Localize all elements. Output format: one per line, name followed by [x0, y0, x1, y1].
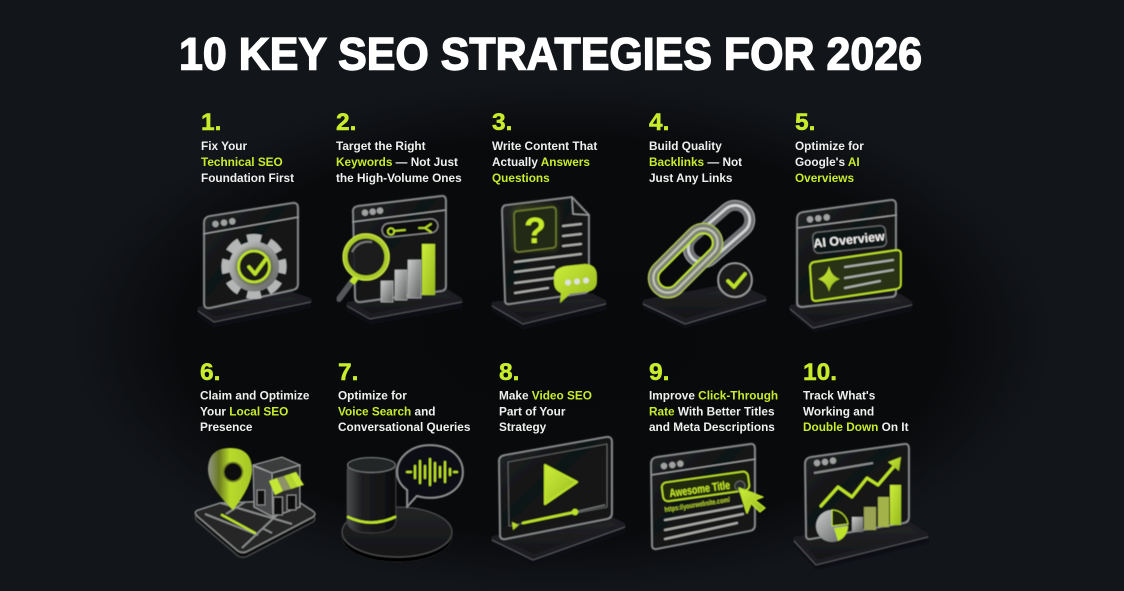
heading 1	[201, 139, 294, 185]
panel: strategy 7	[338, 359, 471, 562]
heading 2: the High-Volume Ones	[336, 171, 462, 185]
heading 8	[499, 388, 592, 434]
heading 3: Actually Answers	[492, 155, 590, 169]
heading 2: Target the Right	[336, 139, 426, 153]
icon: document with question mark	[492, 197, 606, 327]
heading 7: Conversational Queries	[338, 420, 471, 434]
number 8: 8.	[499, 359, 519, 386]
panel: strategy 3	[492, 109, 606, 327]
icon: search result window with cursor: Awesome Title	[669, 480, 731, 500]
heading 1: Fix Your	[201, 139, 248, 153]
heading 1: Technical SEO	[201, 155, 283, 169]
number 2: 2.	[336, 109, 356, 136]
heading 2	[336, 139, 462, 185]
number 6: 6.	[200, 359, 220, 386]
icon: document with question mark: ?	[524, 210, 546, 251]
heading 1: Foundation First	[201, 171, 294, 185]
icon: AI Overview window: AI Overview	[813, 229, 886, 251]
panel: strategy 4	[640, 109, 766, 326]
heading 10	[803, 388, 909, 434]
number 10: 10.	[803, 359, 837, 386]
icon: AI Overview window	[790, 200, 912, 330]
heading 9	[649, 388, 778, 434]
icon: video player	[492, 437, 625, 562]
icon: search result window with cursor	[651, 444, 765, 549]
awning	[269, 472, 304, 495]
heading 7: Optimize for	[338, 388, 407, 402]
icon: magnifier, key and bars	[339, 196, 462, 322]
icon: gear in browser window	[198, 203, 311, 325]
heading 3	[492, 139, 597, 185]
heading 9: Improve Click-Through	[649, 388, 778, 402]
heading 5: Optimize for	[795, 139, 864, 153]
icon: chain links with check	[640, 192, 766, 326]
number 7: 7.	[338, 359, 358, 386]
heading 4: Build Quality	[649, 139, 722, 153]
heading 10: Working and	[803, 404, 874, 418]
panel: strategy 6	[195, 359, 315, 558]
heading 6	[200, 388, 310, 434]
heading 9: and Meta Descriptions	[649, 420, 775, 434]
heading 8: Part of Your	[499, 404, 566, 418]
heading 8: Strategy	[499, 420, 547, 434]
heading 6: Claim and Optimize	[200, 388, 310, 402]
panel: strategy 9	[649, 359, 778, 549]
heading 5	[795, 139, 864, 185]
heading 3: Questions	[492, 171, 550, 185]
heading 6: Your Local SEO	[200, 404, 288, 418]
heading 9: Rate With Better Titles	[649, 404, 775, 418]
heading 6: Presence	[200, 420, 253, 434]
icon: search result window with cursor: https://yourwebsite.com/	[664, 497, 731, 514]
panel: strategy 2	[336, 109, 462, 322]
heading 10: Double Down On It	[803, 420, 909, 434]
heading 7	[338, 388, 471, 434]
panel: strategy 5	[790, 109, 912, 330]
panel: strategy 8	[492, 359, 625, 562]
icon: smart speaker with voice bubble	[342, 445, 463, 562]
number 3: 3.	[492, 109, 512, 136]
heading 3: Write Content That	[492, 139, 597, 153]
number 1: 1.	[201, 109, 221, 136]
number 4: 4.	[649, 109, 669, 136]
heading 8: Make Video SEO	[499, 388, 592, 402]
heading 2: Keywords — Not Just	[336, 155, 458, 169]
heading 7: Voice Search and	[338, 404, 436, 418]
heading 4: Just Any Links	[649, 171, 733, 185]
title: 10 KEY SEO STRATEGIES FOR 2026	[179, 28, 922, 80]
icon: analytics dashboard	[794, 444, 928, 567]
heading 10: Track What's	[803, 388, 876, 402]
heading 4: Backlinks — Not	[649, 155, 742, 169]
panel: strategy 10	[794, 359, 928, 567]
icon: map pin and storefront	[195, 448, 315, 558]
number 9: 9.	[649, 359, 669, 386]
panel: strategy 1	[198, 109, 311, 325]
heading 4	[649, 139, 742, 185]
number 5: 5.	[795, 109, 815, 136]
heading 5: Google's AI	[795, 155, 860, 169]
heading 5: Overviews	[795, 171, 854, 185]
